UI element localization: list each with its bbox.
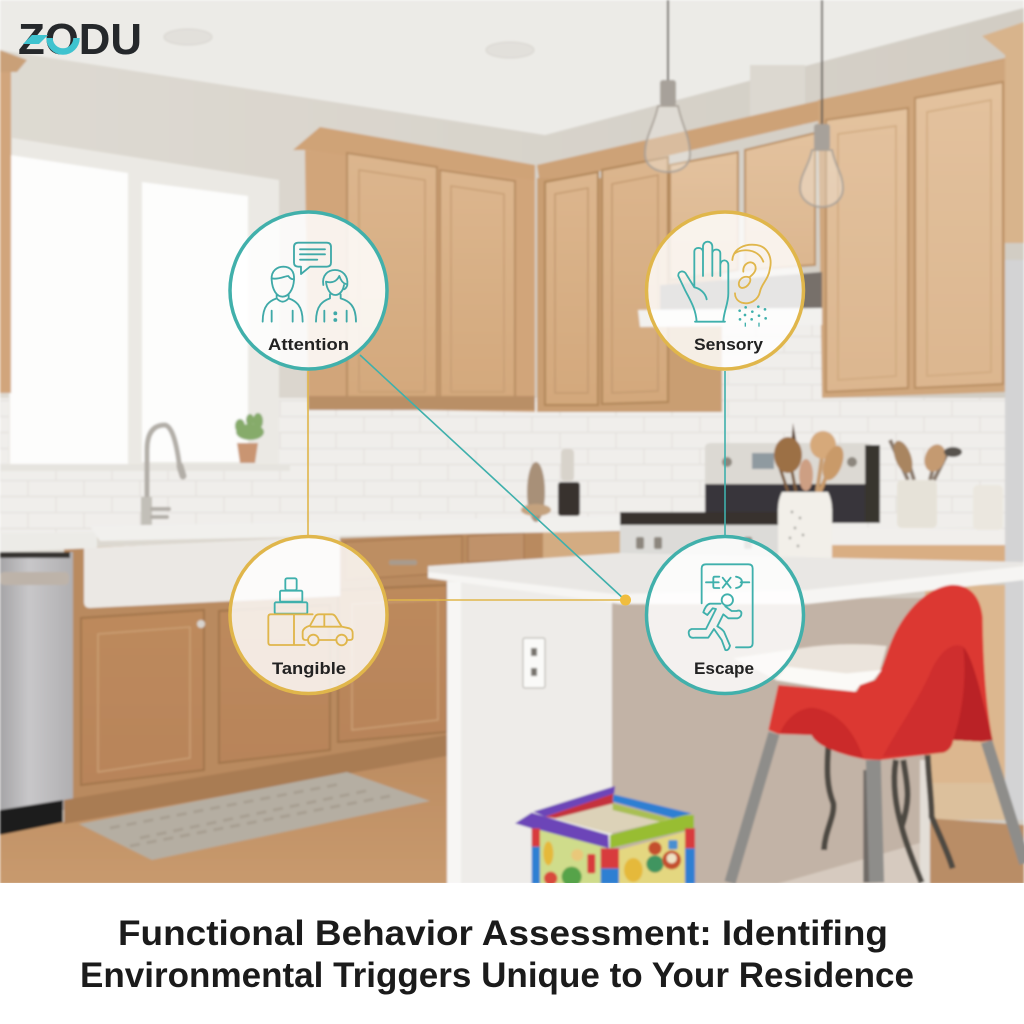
- soffit on right wall: [750, 65, 805, 125]
- label: Attention: [268, 335, 349, 354]
- chair tray lip: [775, 667, 882, 692]
- title: Functional Behavior Assessment: Identifing: [118, 914, 888, 953]
- upper left cabinet run: [293, 127, 535, 412]
- rug: [79, 772, 430, 860]
- counter and farmhouse sink: [0, 516, 622, 608]
- icon: toy blocks and car: [268, 578, 353, 645]
- cup: [973, 485, 1003, 530]
- backsplash tile: [0, 325, 1005, 533]
- faucet: [141, 425, 183, 526]
- recessed ceiling lights: [164, 29, 534, 58]
- chair tray: [733, 644, 887, 692]
- pendant lights: [645, 0, 843, 207]
- high chair: [730, 585, 1024, 883]
- icon: two people talking: [263, 243, 356, 322]
- label: Sensory: [694, 335, 764, 354]
- range hood: [638, 272, 822, 327]
- toe kick: [64, 735, 447, 824]
- icon: hand and ear: [678, 242, 771, 327]
- coffee grinder and jar on counter: [521, 449, 580, 522]
- toy activity box: [515, 786, 695, 887]
- refrigerator edge: [1005, 260, 1024, 820]
- panel: tangible: [230, 536, 387, 694]
- label: Escape: [694, 659, 754, 678]
- connector node: [620, 594, 631, 606]
- top-right cabinet: [982, 22, 1024, 243]
- panel: sensory: [646, 212, 804, 369]
- panel: escape: [646, 536, 804, 694]
- window: [0, 138, 290, 471]
- island: [428, 553, 1024, 884]
- second crock with utensils: [890, 438, 962, 528]
- base cabinets: [64, 528, 625, 822]
- plant on sill: [235, 413, 264, 463]
- title: Environmental Triggers Unique to Your Residence: [80, 956, 914, 995]
- logo: ZODU: [18, 15, 142, 64]
- right counter and shelf: [832, 527, 1024, 884]
- gas range: [620, 443, 880, 556]
- chair straps: [824, 747, 953, 883]
- chair back arch shade: [953, 647, 993, 742]
- wood floor: [0, 756, 447, 884]
- panel: attention: [230, 212, 387, 369]
- label: Tangible: [272, 659, 346, 678]
- wall outlet: [523, 638, 545, 688]
- chair legs: [730, 733, 1024, 883]
- chair seat shadow: [780, 708, 863, 758]
- chair shell: [768, 585, 993, 760]
- dishwasher: [0, 552, 73, 835]
- chair back arch: [883, 645, 993, 757]
- title: [80, 914, 914, 995]
- icon: running figure and exit door: [689, 564, 753, 650]
- connector lines: [308, 355, 725, 600]
- ceiling: [0, 0, 1024, 135]
- far-left wall cabinet: [0, 50, 27, 393]
- bottom white title band: [0, 883, 1024, 1024]
- utensil crock with wooden spoons: [774, 423, 848, 563]
- upper corner cabinet run: [537, 58, 1005, 412]
